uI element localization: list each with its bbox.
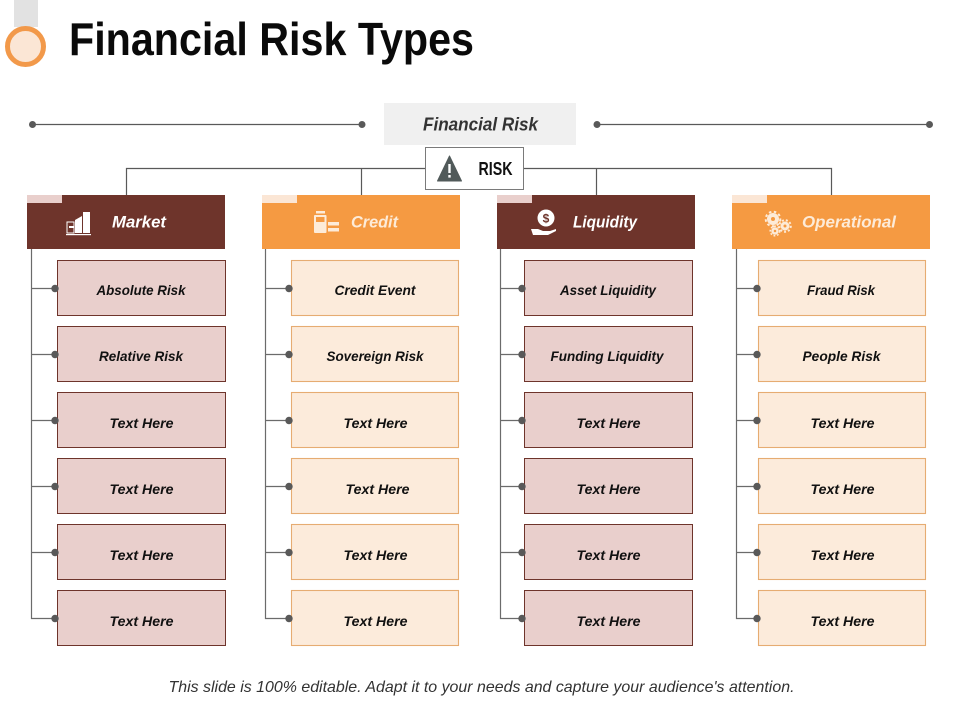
icon: bar chart xyxy=(66,212,91,235)
credit labels: Sovereign Risk xyxy=(326,348,425,364)
liquidity labels: Text Here xyxy=(576,547,641,563)
title: Financial Risk Types xyxy=(69,13,474,65)
operational labels: Text Here xyxy=(810,415,875,431)
credit boxes xyxy=(292,260,458,646)
credit header xyxy=(262,195,460,249)
right connector xyxy=(594,121,933,128)
icon: card terminal xyxy=(314,211,339,233)
liquidity labels: Asset Liquidity xyxy=(559,282,657,298)
market boxes xyxy=(58,260,226,646)
icon: warning triangle xyxy=(438,156,462,181)
risk badge xyxy=(426,148,524,190)
market header xyxy=(27,195,225,249)
liquidity labels: Text Here xyxy=(576,481,641,497)
footer note: This slide is 100% editable. Adapt it to your needs and capture your audience's attention. xyxy=(168,679,794,696)
market tree line xyxy=(32,249,55,618)
operational labels: Fraud Risk xyxy=(807,282,876,298)
operational labels: Text Here xyxy=(810,547,875,563)
market labels: Absolute Risk xyxy=(96,282,187,298)
operational labels: Text Here xyxy=(810,481,875,497)
credit dots xyxy=(285,285,293,622)
panel: market xyxy=(27,195,226,646)
liquidity labels: Text Here xyxy=(576,415,641,431)
credit labels: Text Here xyxy=(344,547,408,563)
risk badge: RISK xyxy=(478,159,512,179)
credit header: Credit xyxy=(351,212,399,232)
liquidity labels: Text Here xyxy=(576,613,641,629)
credit tree line xyxy=(266,249,289,618)
credit labels xyxy=(326,282,425,629)
operational header xyxy=(732,195,930,249)
operational tree line xyxy=(736,249,757,618)
operational header: Operational xyxy=(802,212,897,232)
market labels: Relative Risk xyxy=(99,348,184,364)
icon: gears xyxy=(766,212,791,236)
tree connectors xyxy=(126,168,832,195)
credit labels: Text Here xyxy=(346,481,410,497)
market header: Market xyxy=(112,212,167,232)
operational boxes xyxy=(758,260,926,646)
panel: operational xyxy=(732,195,930,646)
panel: credit xyxy=(262,195,460,646)
icon: hand with coin xyxy=(531,210,556,235)
liquidity header: Liquidity xyxy=(573,212,638,232)
market labels xyxy=(96,282,187,629)
operational labels xyxy=(802,282,882,629)
market labels: Text Here xyxy=(110,613,174,629)
operational labels: People Risk xyxy=(802,348,882,364)
credit labels: Credit Event xyxy=(334,282,417,298)
liquidity boxes xyxy=(524,260,692,646)
liquidity labels: Funding Liquidity xyxy=(550,348,665,364)
market labels: Text Here xyxy=(110,415,174,431)
liquidity header xyxy=(497,195,695,249)
market labels: Text Here xyxy=(110,481,174,497)
operational dots xyxy=(753,285,761,622)
liquidity tree line xyxy=(500,249,522,618)
panel: liquidity xyxy=(497,195,695,646)
credit labels: Text Here xyxy=(344,613,408,629)
operational labels: Text Here xyxy=(810,613,875,629)
market dots xyxy=(51,285,59,622)
icon: hand with coin: $ xyxy=(543,212,550,226)
heading: Financial Risk: Financial Risk xyxy=(423,114,539,134)
heading: Financial Risk xyxy=(384,103,576,145)
market labels: Text Here xyxy=(110,547,174,563)
left connector xyxy=(29,121,366,128)
credit labels: Text Here xyxy=(344,415,408,431)
liquidity dots xyxy=(518,285,526,622)
icon: title marker ring xyxy=(8,0,44,64)
liquidity labels xyxy=(550,282,665,629)
